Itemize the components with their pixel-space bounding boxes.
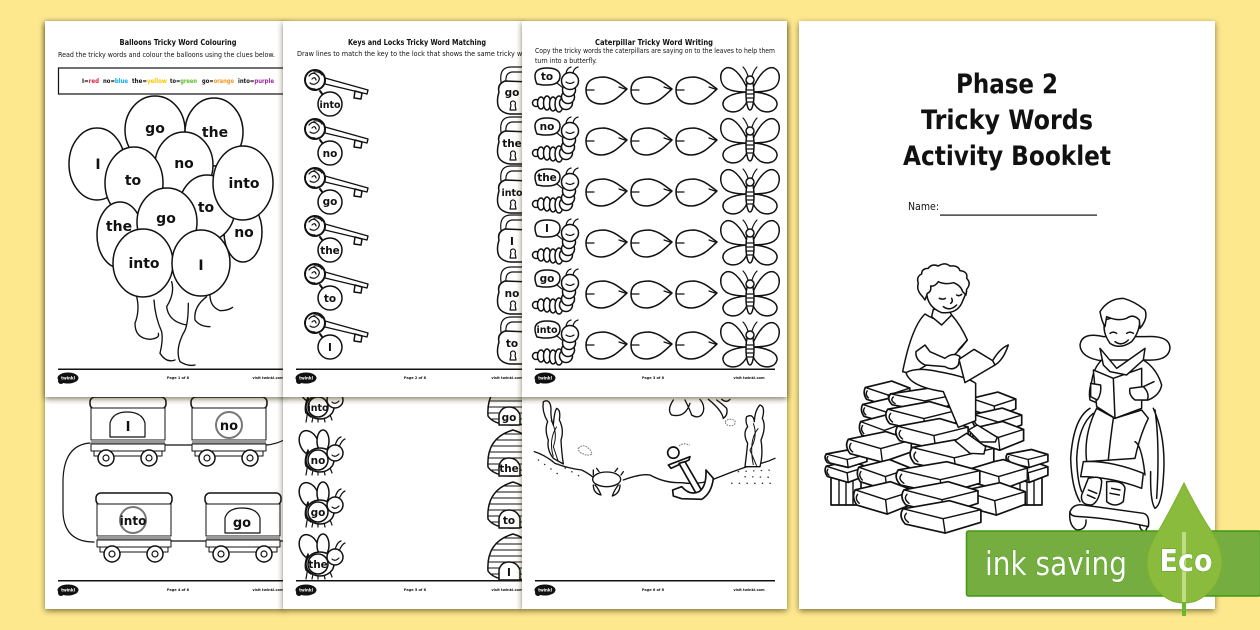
balloon: I lower [172,230,230,296]
hive: I: I [507,567,511,579]
row: into: into [536,325,558,336]
instructions: Copy the tricky words the caterpillars are saying on to the leaves to help them [535,47,775,55]
row: to: to [541,71,553,83]
train car: no [191,397,267,466]
footer: Page 5 of 8 [404,588,427,592]
footer [534,580,775,596]
footer [296,580,523,596]
hive: the [488,430,538,476]
key: no: no [323,148,337,160]
footer: Page 2 of 8 [404,376,427,380]
balloon: go lower [137,188,197,256]
lock: the [498,117,530,164]
hive: go [488,379,538,425]
panel: caterpillar worksheet [522,21,787,397]
balloon: to: to [198,200,215,216]
bee: into: into [307,403,329,414]
bee: no [295,427,345,475]
balloon: into [213,146,273,220]
sea floor line [534,452,775,483]
eco leaf drop [1147,483,1222,616]
panel: bees and hives worksheet [283,21,538,609]
row: the [532,168,779,214]
panel: sea scene worksheet [522,21,787,609]
colour key box: go=orange [202,77,234,85]
train car: I [90,397,166,466]
balloon: no (back) [224,202,262,262]
fish and bubbles [578,419,735,455]
eco leaf drop: Eco [1160,544,1212,579]
row: the: the [537,172,557,184]
footer: visit twinkl.com [491,376,523,380]
key: to: to [324,293,336,305]
balloon: to left [105,147,163,219]
lock: I [498,215,530,262]
balloon: into lower [113,229,173,297]
row: I: I [545,223,549,235]
row: no [532,117,779,163]
row: to [532,67,779,112]
balloon: the: the [202,125,228,141]
bee: go: go [311,507,325,519]
train car: into: into [120,514,146,528]
colour key box [58,68,284,94]
heading: Caterpillar Tricky Word Writing [595,38,713,47]
key: to [305,264,368,310]
anchor [668,447,713,499]
panel: train worksheet [45,21,285,609]
colour key box: into=purple [238,77,274,85]
panel: caterpillar worksheet: turn into a butterfly. [535,57,597,65]
footer [534,368,775,384]
balloon: no: no [174,156,194,172]
bee: no: no [311,455,325,467]
balloons [69,96,273,297]
footer: visit twinkl.com [733,376,765,380]
panel: keys and locks worksheet [283,21,535,397]
lock: go: go [505,87,519,99]
name field: Name: [908,201,939,213]
instructions: Draw lines to match the key to the lock that shows the same tricky word. [297,50,535,58]
footer: visit twinkl.com [252,588,284,592]
panel: balloons worksheet [45,21,285,397]
illustration: stack of books [825,381,1048,533]
key: the: the [320,245,340,257]
footer: Page 4 of 8 [167,588,190,592]
footer [296,368,523,384]
hive: I [488,534,538,580]
balloon: go: go [145,121,165,137]
illustration: boy reading on books [903,264,1008,454]
bee: the: the [308,559,328,571]
cover title: Tricky Words [921,105,1093,136]
lock: no [498,267,530,314]
ink saving banner [966,531,1260,596]
instructions: Read the tricky words and colour the balloons using the clues below. [58,51,275,59]
balloon: into lower: into [128,256,160,272]
heading: Keys and Locks Tricky Word Matching [348,38,486,47]
balloon: I: I [95,157,101,173]
sand dots [538,457,772,483]
balloon: the [185,98,243,166]
balloon: into: into [228,176,260,192]
train car: go: go [233,516,251,531]
row: I [532,219,779,265]
train car: go [205,493,281,562]
key: the [305,216,368,262]
hive: to [488,482,538,528]
lock: to [498,317,530,364]
heading: Balloons Tricky Word Colouring [120,38,237,47]
footer: Page 1 of 8 [167,376,190,380]
footer: visit twinkl.com [733,588,765,592]
colour key box: I=red [82,77,99,85]
footer: visit twinkl.com [491,588,523,592]
row: go [532,269,779,316]
colour key box: to=green [170,77,197,85]
key: into: into [319,100,341,111]
eco badge [966,483,1260,616]
balloon: no (back): no [234,225,254,241]
lock: I: I [510,236,514,248]
row: into [532,320,779,367]
illustration: boy in wheelchair [1070,298,1170,532]
hive: to: to [503,515,515,527]
key: into [305,70,368,116]
balloon: the lower [97,202,143,268]
bee: go [295,479,345,527]
panel: booklet cover [799,21,1215,609]
ink saving banner: ink saving [985,544,1127,583]
balloon: go lower: go [156,211,176,227]
key: go: go [323,196,337,208]
footer [58,368,284,384]
key: no [305,119,368,165]
seaweed left [543,401,563,464]
train car: I: I [126,420,130,435]
row: no: no [540,121,554,133]
cover title: Phase 2 [956,69,1058,100]
train car: no: no [220,419,238,434]
bee: the [295,531,345,579]
hive: the: the [499,463,519,475]
footer: visit twinkl.com [252,376,284,380]
footer: Page 6 of 8 [642,588,665,592]
row: go: go [540,273,554,285]
balloon: no [155,132,213,198]
balloon: to left: to [125,173,142,189]
footer [58,580,284,596]
key: I: I [328,342,332,354]
cover title [903,69,1111,172]
lock: the: the [502,138,522,150]
octopus tentacles [670,399,730,418]
train connector lines [63,440,284,542]
footer: Page 3 of 8 [642,376,665,380]
crab [593,468,623,496]
key: I [305,313,368,359]
lock: into [498,166,530,213]
lock: go [498,67,530,114]
lock: no: no [505,288,519,300]
seaweed right [745,405,764,467]
cover title: Activity Booklet [903,141,1111,172]
balloon: I lower: I [198,258,204,274]
balloon: the lower: the [106,219,132,235]
train car: into [96,493,172,562]
key: go [305,168,368,214]
balloon: go [125,96,185,164]
sea scene illustration [534,399,775,499]
colour key box: the=yellow [132,77,167,85]
lock: to: to [506,338,518,350]
bee: into [295,374,345,422]
balloon: I [69,128,125,200]
hive: go: go [502,412,516,424]
balloon strings [135,282,233,365]
lock: into: into [501,188,523,199]
colour key box: no=blue [103,77,128,85]
balloon: to [179,175,235,241]
